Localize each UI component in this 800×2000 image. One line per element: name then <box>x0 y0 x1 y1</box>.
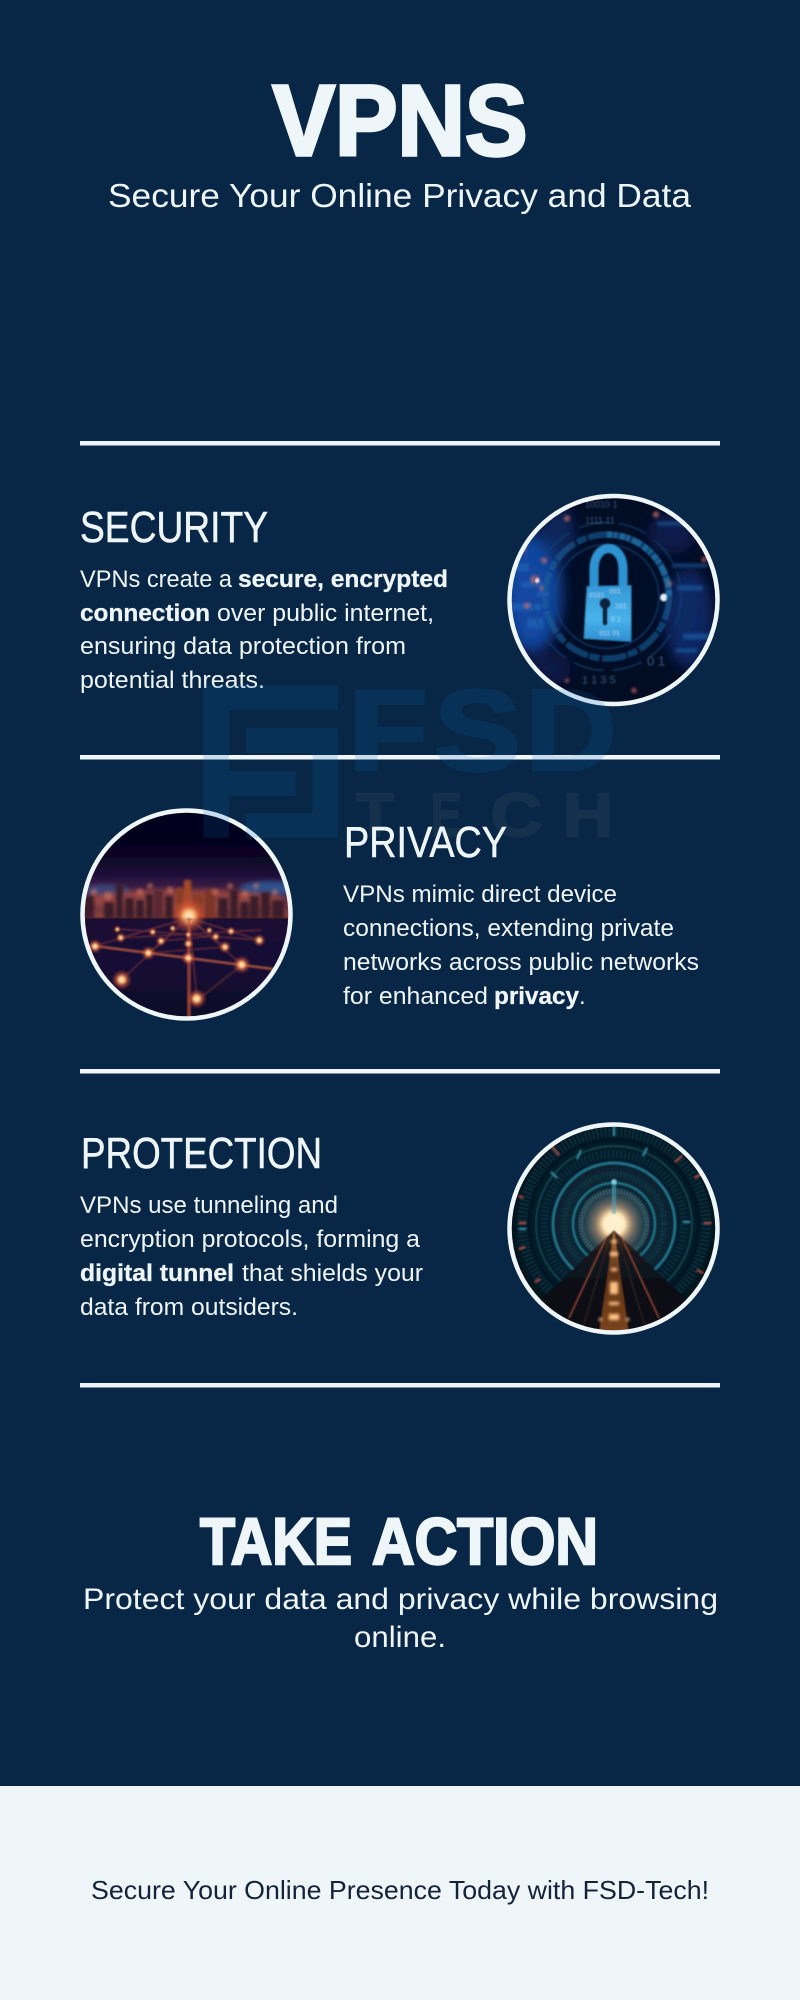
text block: security: VPNs create a <box>80 566 233 593</box>
heading: privacy: PRIVACY <box>344 818 507 867</box>
text block: protection: digital tunnel <box>80 1260 234 1287</box>
text block: security: ensuring data protection from <box>80 633 406 660</box>
icon: digital tunnel image <box>507 1122 720 1335</box>
icon frame: protection <box>510 1124 718 1332</box>
text block: protection: that shields your <box>242 1260 423 1287</box>
text block: protection: data from outsiders. <box>80 1294 298 1321</box>
icon frame: privacy <box>82 810 290 1018</box>
text block: protection: encryption protocols, forming a <box>80 1226 421 1253</box>
text block: privacy: privacy <box>494 983 580 1010</box>
panel: protection <box>80 1122 720 1335</box>
logo mark <box>203 685 338 838</box>
text block: call to action: Protect your data and privacy while browsing <box>83 1583 718 1616</box>
logo word TECH: T <box>356 781 394 849</box>
logo word TECH <box>356 781 613 849</box>
heading: take action: TAKE <box>200 1504 352 1578</box>
logo word FSD: S <box>434 667 521 795</box>
text block: call to action <box>83 1583 718 1654</box>
heading: take action: ACTION <box>372 1504 598 1578</box>
icon: digital padlock image: 001 <box>609 588 621 596</box>
text block: security: secure, encrypted <box>238 566 448 593</box>
icon: digital padlock image: 1 1 3 5 <box>582 674 616 686</box>
icon: digital padlock image <box>502 494 720 706</box>
icon: digital padlock image: 10010 1 <box>585 500 618 510</box>
text block: privacy: networks across public networks <box>343 949 699 976</box>
text block: privacy: for enhanced <box>343 983 488 1010</box>
logo word TECH: C <box>490 781 542 849</box>
text block: call to action: online. <box>354 1621 446 1654</box>
heading: security: SECURITY <box>80 503 268 552</box>
text block: security <box>80 566 448 694</box>
text block: privacy <box>343 881 699 1010</box>
footer text: Secure Your Online Presence Today with FSD-Tech! <box>91 1875 709 1905</box>
text block: security: potential threats. <box>80 667 265 694</box>
logo word TECH: H <box>563 781 613 849</box>
text block: privacy: connections, extending private <box>343 915 674 942</box>
subtitle: Secure Your Online Privacy and Data <box>108 177 692 214</box>
text block: security: over public internet, <box>217 600 434 627</box>
watermark: FSD Tech logo <box>203 667 617 849</box>
text block: protection <box>80 1192 423 1321</box>
panel: privacy <box>80 808 699 1021</box>
heading: take action <box>200 1504 598 1578</box>
icon: digital padlock image: 0 1 <box>611 616 621 624</box>
panel: security <box>80 494 720 706</box>
logo word TECH: E <box>430 781 462 849</box>
heading: protection: PROTECTION <box>81 1129 322 1178</box>
icon: digital padlock image: 101 <box>615 604 627 610</box>
divider 2 <box>80 755 720 760</box>
icon: digital padlock image: 0101 <box>589 592 605 600</box>
logo word FSD <box>348 667 616 795</box>
footer band <box>0 1786 800 2000</box>
text block: security: connection <box>80 600 210 627</box>
text block: privacy: VPNs mimic direct device <box>343 881 617 908</box>
logo word FSD: F <box>348 667 428 795</box>
text block: privacy: . <box>579 983 586 1010</box>
icon: digital padlock image: 1111 11 <box>585 516 615 526</box>
icon: digital padlock image: 011 01 <box>599 630 620 638</box>
divider 3 <box>80 1069 720 1074</box>
icon: digital padlock image: 0 1 <box>647 654 665 668</box>
logo word FSD: D <box>526 667 616 795</box>
icon: city network image <box>80 808 300 1021</box>
icon frame: security <box>510 496 718 704</box>
title: VPNS <box>272 65 528 177</box>
divider 4 <box>80 1383 720 1388</box>
text block: protection: VPNs use tunneling and <box>80 1192 338 1219</box>
divider top <box>80 441 720 446</box>
